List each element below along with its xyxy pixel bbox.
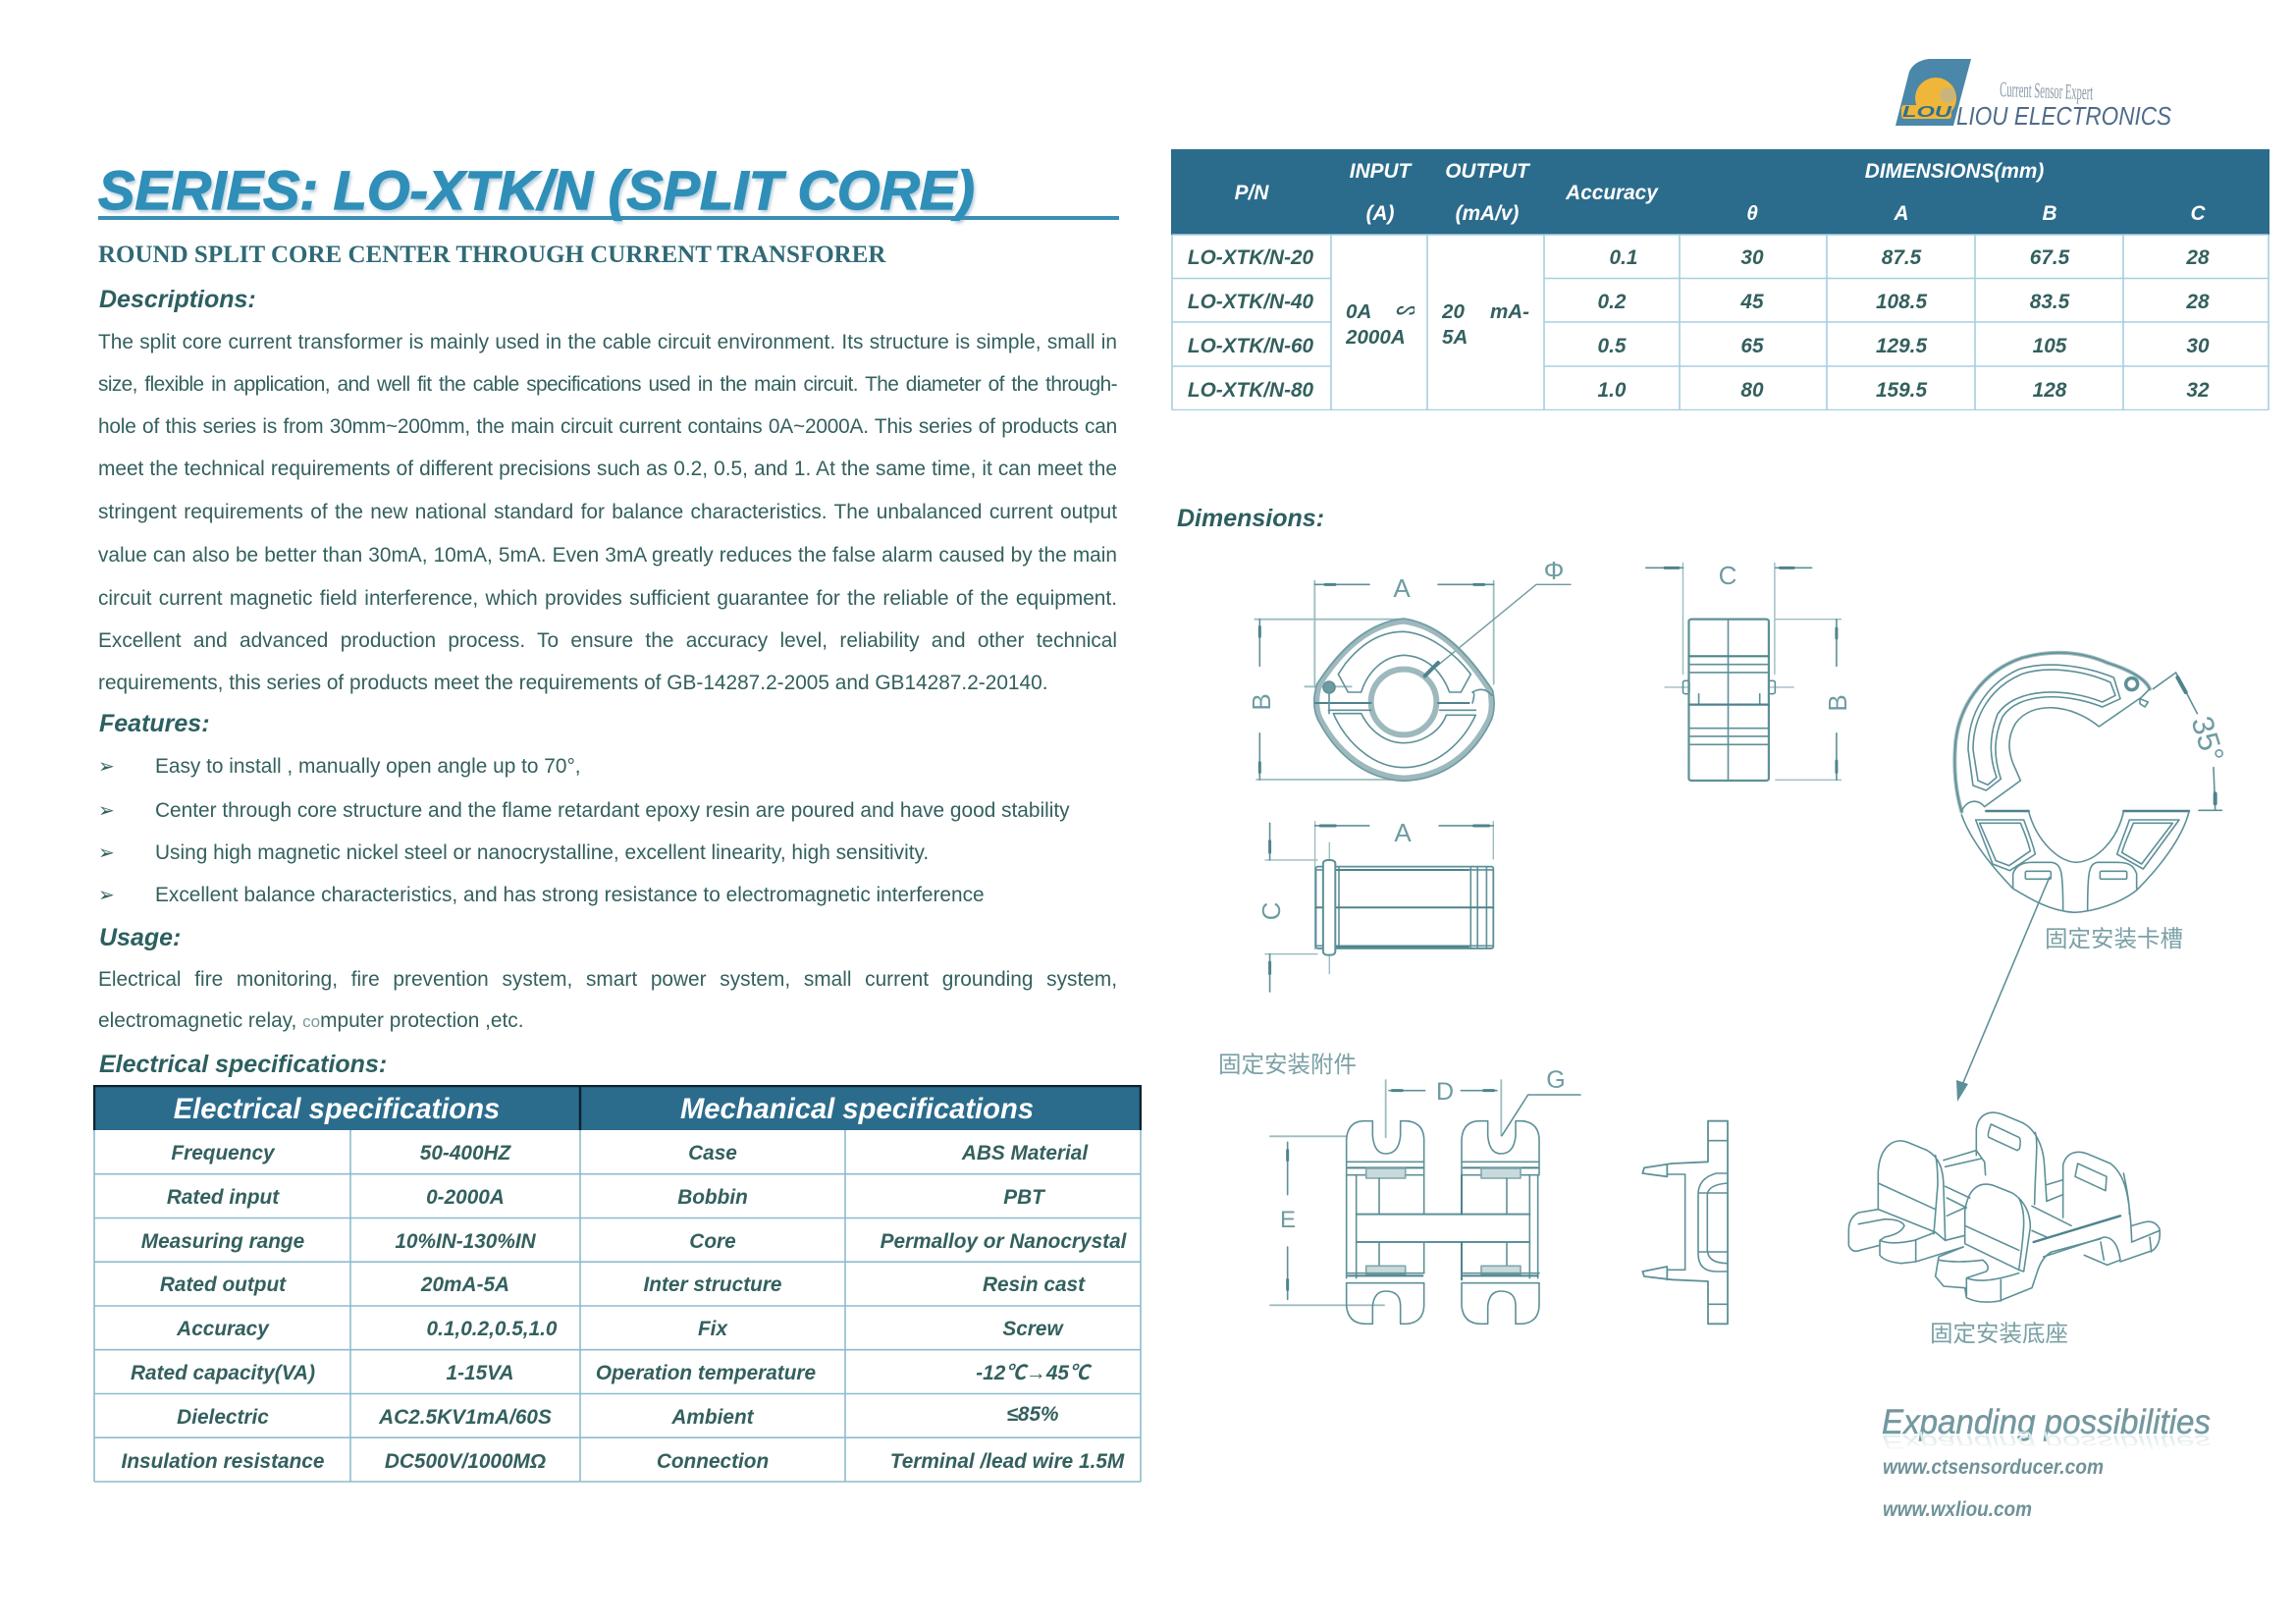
heading: descriptions: Descriptions: bbox=[99, 286, 256, 313]
table rows: Rated output bbox=[160, 1273, 286, 1296]
table rows: 0.5 bbox=[1598, 334, 1626, 357]
table rows: Rated input bbox=[167, 1186, 279, 1208]
table rows: Screw bbox=[1002, 1318, 1063, 1339]
subtitle: ROUND SPLIT CORE CENTER THROUGH CURRENT TRANSFORER bbox=[98, 242, 885, 268]
title: SERIES: LO-XTK/N (SPLIT CORE) bbox=[98, 159, 975, 221]
list: features: ➢ bbox=[98, 798, 115, 822]
arrow: from slot to mounting base bbox=[1956, 877, 2050, 1102]
table rows: PBT bbox=[1003, 1186, 1044, 1208]
logo bbox=[1896, 59, 2172, 131]
table rows: 20 mA- bbox=[1442, 300, 1529, 322]
table: part numbers and dimensions bbox=[1171, 149, 2269, 410]
table rows: 108.5 bbox=[1876, 291, 1927, 313]
list: features: Using high magnetic nickel steel or nanocrystalline, excellent linearity, high sensitivity. bbox=[155, 841, 929, 864]
table rows: LO-XTK/N-80 bbox=[1188, 379, 1313, 401]
drawing: mounting accessory front view with dimensions D, E, G bbox=[1270, 1066, 1580, 1324]
drawing: mounting accessory side view bbox=[1642, 1121, 1728, 1324]
table rows: Operation temperature bbox=[596, 1361, 816, 1384]
table rows: Connection bbox=[657, 1449, 769, 1473]
drawing: open core showing 35 degree angle bbox=[1954, 653, 2231, 912]
table header: OUTPUT bbox=[1445, 159, 1529, 183]
table rows: Core bbox=[689, 1229, 736, 1253]
table rows: Ambient bbox=[671, 1406, 754, 1428]
table rows: 0-2000A bbox=[426, 1186, 505, 1208]
table rows: Inter structure bbox=[644, 1273, 781, 1296]
table rows: LO-XTK/N-40 bbox=[1188, 291, 1313, 313]
drawing: side view with dimensions C, B bbox=[1646, 561, 1852, 781]
label: mounting accessory: 固定安装附件 bbox=[1218, 1052, 1357, 1077]
table rows: 0.2 bbox=[1598, 291, 1626, 313]
text block: descriptions: size, flexible in application, and well fit the cable specifications used in the main circuit. The diameter of the through- bbox=[98, 373, 1117, 396]
slogan: expanding possibilities: Expanding possibilities bbox=[1882, 1432, 2211, 1453]
text block: usage bbox=[98, 968, 1117, 1032]
table rows: 30 bbox=[2186, 334, 2210, 357]
table rows: 0.1 bbox=[1610, 246, 1637, 269]
table rows: 1-15VA bbox=[447, 1361, 513, 1384]
text block: descriptions: circuit current magnetic field interference, which provides sufficient guarantee for the reliable of the equipment. bbox=[98, 587, 1117, 610]
list: features: Easy to install , manually open angle up to 70°, bbox=[155, 755, 581, 778]
table rows bbox=[122, 1141, 1127, 1473]
table rows: 10%IN-130%IN bbox=[395, 1229, 536, 1253]
label: fixed mounting slot: 固定安装卡槽 bbox=[2045, 926, 2183, 951]
table rows: 128 bbox=[2033, 379, 2066, 401]
text block: usage: electromagnetic relay, computer protection ,etc. bbox=[98, 1009, 524, 1032]
heading: dimensions: Dimensions: bbox=[1177, 505, 1324, 532]
text block: usage: Electrical fire monitoring, fire prevention system, smart power system, small current grounding system, bbox=[98, 968, 1117, 991]
table header bbox=[1235, 159, 2206, 224]
table rows: Permalloy or Nanocrystal bbox=[881, 1229, 1126, 1253]
text block: descriptions: hole of this series is from 30mm~200mm, the main circuit current contains 0A~2000A. This series of products can bbox=[98, 415, 1117, 438]
table rows: Measuring range bbox=[141, 1229, 304, 1253]
drawing: side view with dimensions C, B: B bbox=[1823, 694, 1852, 712]
drawing: front view with dimensions A, B and diameter: A bbox=[1393, 573, 1411, 603]
table rows: 45 bbox=[1740, 291, 1764, 313]
table header: θ bbox=[1746, 202, 1758, 224]
table: electrical and mechanical specifications bbox=[93, 1085, 1142, 1483]
table header: INPUT bbox=[1350, 159, 1411, 183]
list: features: Center through core structure and the flame retardant epoxy resin are poured and have good stability bbox=[155, 799, 1070, 822]
table rows: 83.5 bbox=[2030, 291, 2069, 313]
table header: Accuracy bbox=[1566, 181, 1658, 204]
website links: www.ctsensorducer.com bbox=[1883, 1456, 2104, 1479]
table rows: 5A bbox=[1442, 326, 1468, 348]
drawing: top view with dimensions A, C: A bbox=[1394, 818, 1412, 847]
list: features: Excellent balance characteristics, and has strong resistance to electromagnetic interference bbox=[155, 884, 985, 906]
table rows: 28 bbox=[2186, 246, 2210, 269]
drawing: side view with dimensions C, B: C bbox=[1719, 561, 1736, 590]
table rows: LO-XTK/N-20 bbox=[1188, 246, 1313, 269]
table rows: 28 bbox=[2186, 291, 2210, 313]
drawing: mounting accessory front view with dimensions D, E, G: G bbox=[1546, 1066, 1566, 1094]
drawing: mounting accessory front view with dimensions D, E, G: D bbox=[1436, 1078, 1454, 1106]
table header: B bbox=[2042, 202, 2057, 224]
drawing: mounting accessory front view with dimensions D, E, G: E bbox=[1280, 1207, 1296, 1233]
drawing: open core showing 35 degree angle: 35° bbox=[2184, 712, 2231, 766]
list: features bbox=[98, 754, 1070, 906]
heading: usage: Usage: bbox=[99, 924, 181, 951]
drawing: top view with dimensions A, C bbox=[1256, 818, 1493, 992]
table header: A bbox=[1894, 202, 1909, 224]
table rows: Resin cast bbox=[983, 1273, 1085, 1296]
list: features: ➢ bbox=[98, 754, 115, 778]
text block: descriptions bbox=[98, 331, 1117, 694]
heading: electrical specifications: Electrical specifications: bbox=[99, 1051, 387, 1078]
website links: www.wxliou.com bbox=[1883, 1498, 2032, 1521]
table rows: AC2.5KV1mA/60S bbox=[379, 1406, 552, 1428]
table rows: LO-XTK/N-60 bbox=[1188, 334, 1313, 357]
table rows: Case bbox=[688, 1141, 737, 1164]
table rows: 2000A bbox=[1346, 326, 1406, 348]
table header: P/N bbox=[1235, 181, 1268, 204]
table header: DIMENSIONS(mm) bbox=[1865, 159, 2044, 183]
text block: descriptions: The split core current transformer is mainly used in the cable circuit environment. Its structure is simple, small in bbox=[98, 331, 1117, 353]
table rows: 0A ∽ bbox=[1346, 300, 1415, 322]
text block: descriptions: requirements, this series of products meet the requirements of GB-14287.2-2005 and GB14287.2-20140. bbox=[98, 672, 1047, 694]
table rows: ABS Material bbox=[962, 1141, 1088, 1164]
table rows: 30 bbox=[1740, 246, 1764, 269]
table header: mechanical: Mechanical specifications bbox=[680, 1094, 1034, 1125]
text block: descriptions: Excellent and advanced production process. To ensure the accuracy level, reliability and other technical bbox=[98, 629, 1117, 652]
list: features: ➢ bbox=[98, 883, 115, 906]
text block: descriptions: stringent requirements of the new national standard for balance characteristics. The unbalanced current output bbox=[98, 501, 1117, 523]
slogan: expanding possibilities: Expanding possibilities bbox=[1882, 1403, 2211, 1441]
logo: LOU bbox=[1902, 104, 1952, 121]
table rows: Accuracy bbox=[177, 1318, 269, 1339]
table rows: Fix bbox=[698, 1318, 727, 1339]
list: features: ➢ bbox=[98, 840, 115, 864]
drawing: mounting base bbox=[1848, 1112, 2160, 1302]
table rows bbox=[1188, 246, 2210, 401]
text block: descriptions: value can also be better than 30mA, 10mA, 5mA. Even 3mA greatly reduces the false alarm caused by the main bbox=[98, 544, 1117, 567]
table rows: DC500V/1000MΩ bbox=[385, 1449, 546, 1473]
table rows: 32 bbox=[2186, 379, 2210, 401]
table header: electrical: Electrical specifications bbox=[174, 1094, 500, 1125]
table rows: ≤85% bbox=[1006, 1402, 1059, 1426]
table rows: Insulation resistance bbox=[122, 1449, 324, 1473]
table rows: 20mA-5A bbox=[421, 1273, 509, 1296]
table rows: 87.5 bbox=[1882, 246, 1921, 269]
website links bbox=[1883, 1456, 2104, 1521]
table rows: 67.5 bbox=[2030, 246, 2069, 269]
table rows: Frequency bbox=[171, 1141, 275, 1164]
table rows: -12℃→45℃ bbox=[976, 1361, 1090, 1384]
heading: features: Features: bbox=[99, 710, 210, 737]
table rows: 1.0 bbox=[1598, 379, 1626, 401]
text block: descriptions: meet the technical requirements of different precisions such as 0.2, 0.5, and 1. At the same time, it can meet the bbox=[98, 458, 1117, 480]
table rows: 65 bbox=[1740, 334, 1764, 357]
label: mounting base: 固定安装底座 bbox=[1930, 1321, 2068, 1346]
table rows: 105 bbox=[2033, 334, 2066, 357]
drawing: front view with dimensions A, B and diameter: B bbox=[1247, 693, 1276, 711]
drawing: front view with dimensions A, B and diameter: Φ bbox=[1544, 556, 1564, 585]
drawing: front view with dimensions A, B and diameter bbox=[1247, 556, 1571, 781]
table header: (A) bbox=[1366, 202, 1394, 224]
table rows: 0.1,0.2,0.5,1.0 bbox=[427, 1318, 557, 1339]
table rows: Dielectric bbox=[177, 1406, 269, 1428]
table header: (mA/v) bbox=[1456, 202, 1519, 224]
table rows: Rated capacity(VA) bbox=[131, 1361, 315, 1384]
table rows: 129.5 bbox=[1876, 334, 1927, 357]
table header: C bbox=[2190, 202, 2206, 224]
table rows: Bobbin bbox=[677, 1186, 748, 1208]
drawing: top view with dimensions A, C: C bbox=[1256, 902, 1286, 920]
table rows: 80 bbox=[1740, 379, 1764, 401]
table rows: 50-400HZ bbox=[420, 1141, 510, 1164]
table rows: Terminal /lead wire 1.5M bbox=[890, 1449, 1124, 1473]
table rows: 159.5 bbox=[1876, 379, 1927, 401]
